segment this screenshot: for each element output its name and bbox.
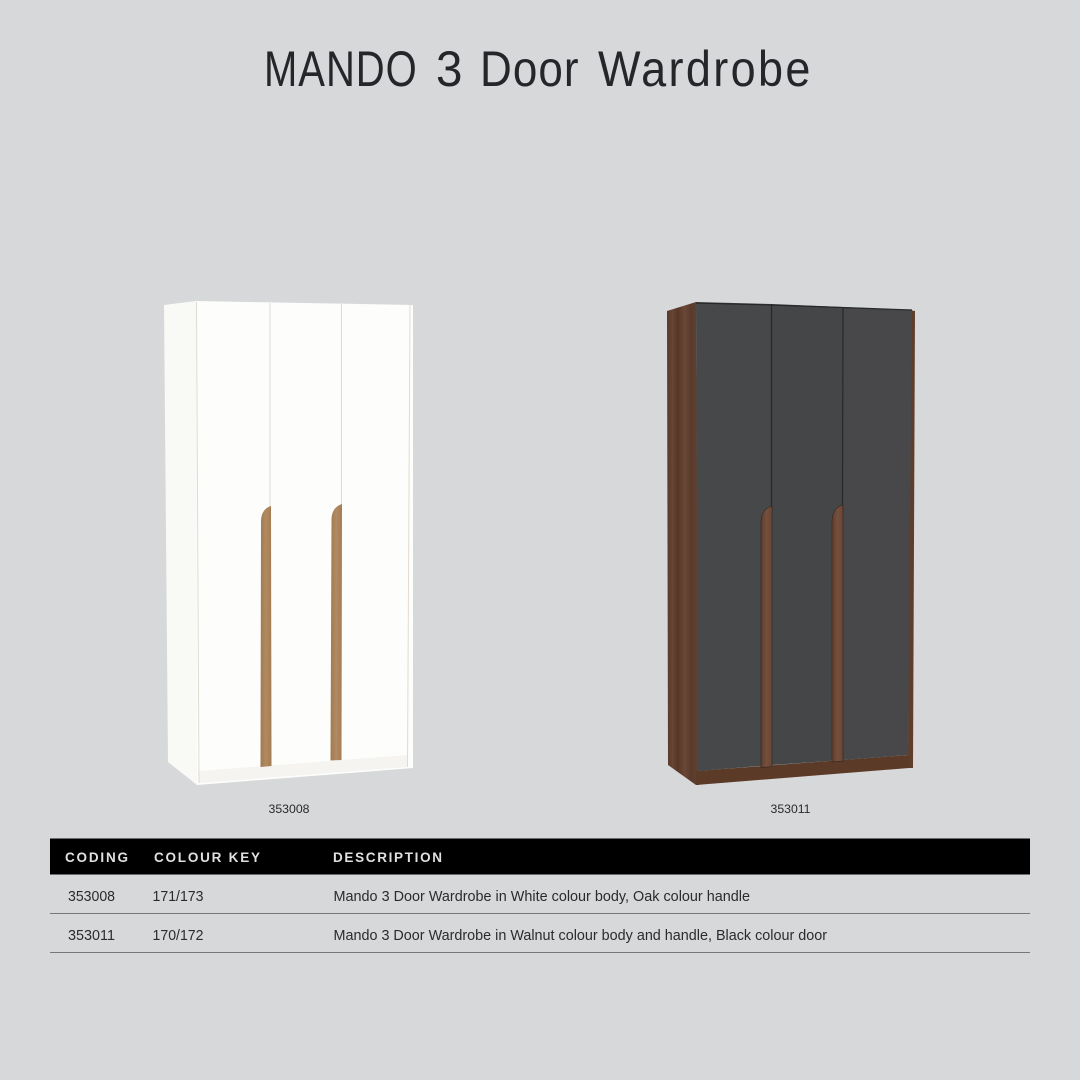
side panel bbox=[164, 301, 199, 785]
table header bar bbox=[50, 838, 1030, 874]
wardrobe code label: walnut: 353011 bbox=[770, 802, 811, 816]
row 2: 170/172 bbox=[152, 928, 204, 944]
door seams bbox=[696, 303, 912, 507]
title: 3 bbox=[436, 42, 462, 97]
walnut handle right bbox=[832, 505, 843, 762]
walnut handle left bbox=[761, 506, 772, 768]
door fronts bbox=[696, 302, 772, 771]
row 1: 171/173 bbox=[152, 889, 204, 905]
door seams bbox=[196, 302, 410, 783]
plinth bbox=[199, 755, 407, 783]
row 2 bbox=[68, 928, 827, 944]
title: Door bbox=[480, 40, 579, 97]
title: MANDO bbox=[264, 41, 417, 97]
wardrobe code label: white: 353008 bbox=[268, 802, 310, 816]
wardrobe: white body with oak handles bbox=[164, 301, 413, 785]
oak handle left bbox=[260, 506, 272, 767]
header: description: DESCRIPTION bbox=[333, 850, 442, 865]
header: coding: CODING bbox=[65, 850, 128, 865]
plinth bbox=[696, 755, 909, 785]
door fronts bbox=[196, 301, 413, 785]
row 2: 353011 bbox=[68, 928, 115, 944]
header: colour key: COLOUR KEY bbox=[154, 850, 260, 865]
title: Wardrobe bbox=[598, 42, 810, 98]
title bbox=[264, 40, 810, 98]
row 1: 353008 bbox=[68, 889, 115, 905]
specification table bbox=[50, 838, 1030, 953]
right edge strip bbox=[908, 310, 915, 768]
oak handle right bbox=[330, 504, 342, 760]
row 2: Mando 3 Door Wardrobe in Walnut colour body and handle, Black colour door bbox=[334, 928, 827, 944]
row 1 bbox=[68, 889, 750, 905]
wardrobe: walnut body with black doors bbox=[667, 302, 915, 785]
side panel bbox=[667, 302, 699, 785]
row 1: Mando 3 Door Wardrobe in White colour body, Oak colour handle bbox=[334, 889, 750, 905]
